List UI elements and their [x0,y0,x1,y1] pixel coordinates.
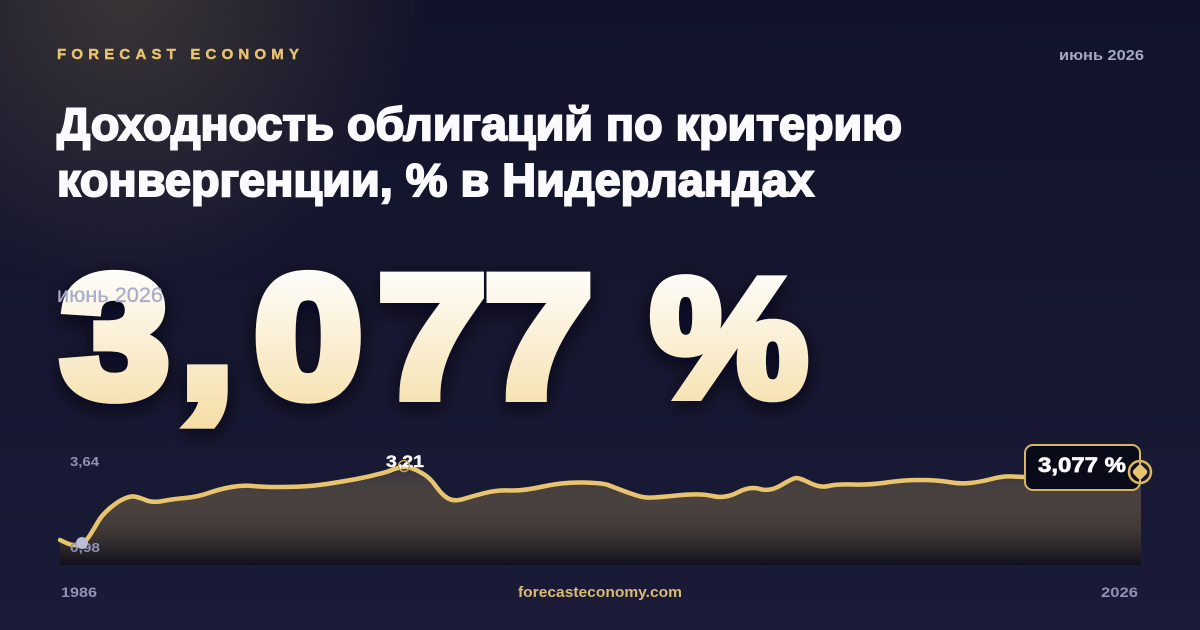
line chart [60,445,1151,565]
big value: % [651,244,808,432]
chart area [60,467,1141,565]
title: конвергенции, % в Нидерландах [57,154,814,206]
chart line [60,467,1040,545]
peak marker [398,460,410,472]
start year: 1986 [61,584,97,600]
peak label: 3,21 [386,452,424,471]
current marker [1129,461,1151,483]
date subtitle: июнь 2026 [57,283,163,307]
min marker [76,537,88,549]
end year: 2026 [1101,584,1138,600]
title [57,98,902,206]
current value callout [1025,445,1140,490]
footer source: forecasteconomy.com [518,585,682,601]
big value: 3,077 [62,241,592,433]
brand label: FORECAST ECONOMY [57,46,299,63]
max label: 3,64 [70,454,100,469]
date top right: июнь 2026 [1059,47,1144,64]
title: Доходность облигаций по критерию [57,98,902,150]
min label: 0,98 [70,540,100,555]
current value callout: 3,077 % [1038,454,1126,477]
